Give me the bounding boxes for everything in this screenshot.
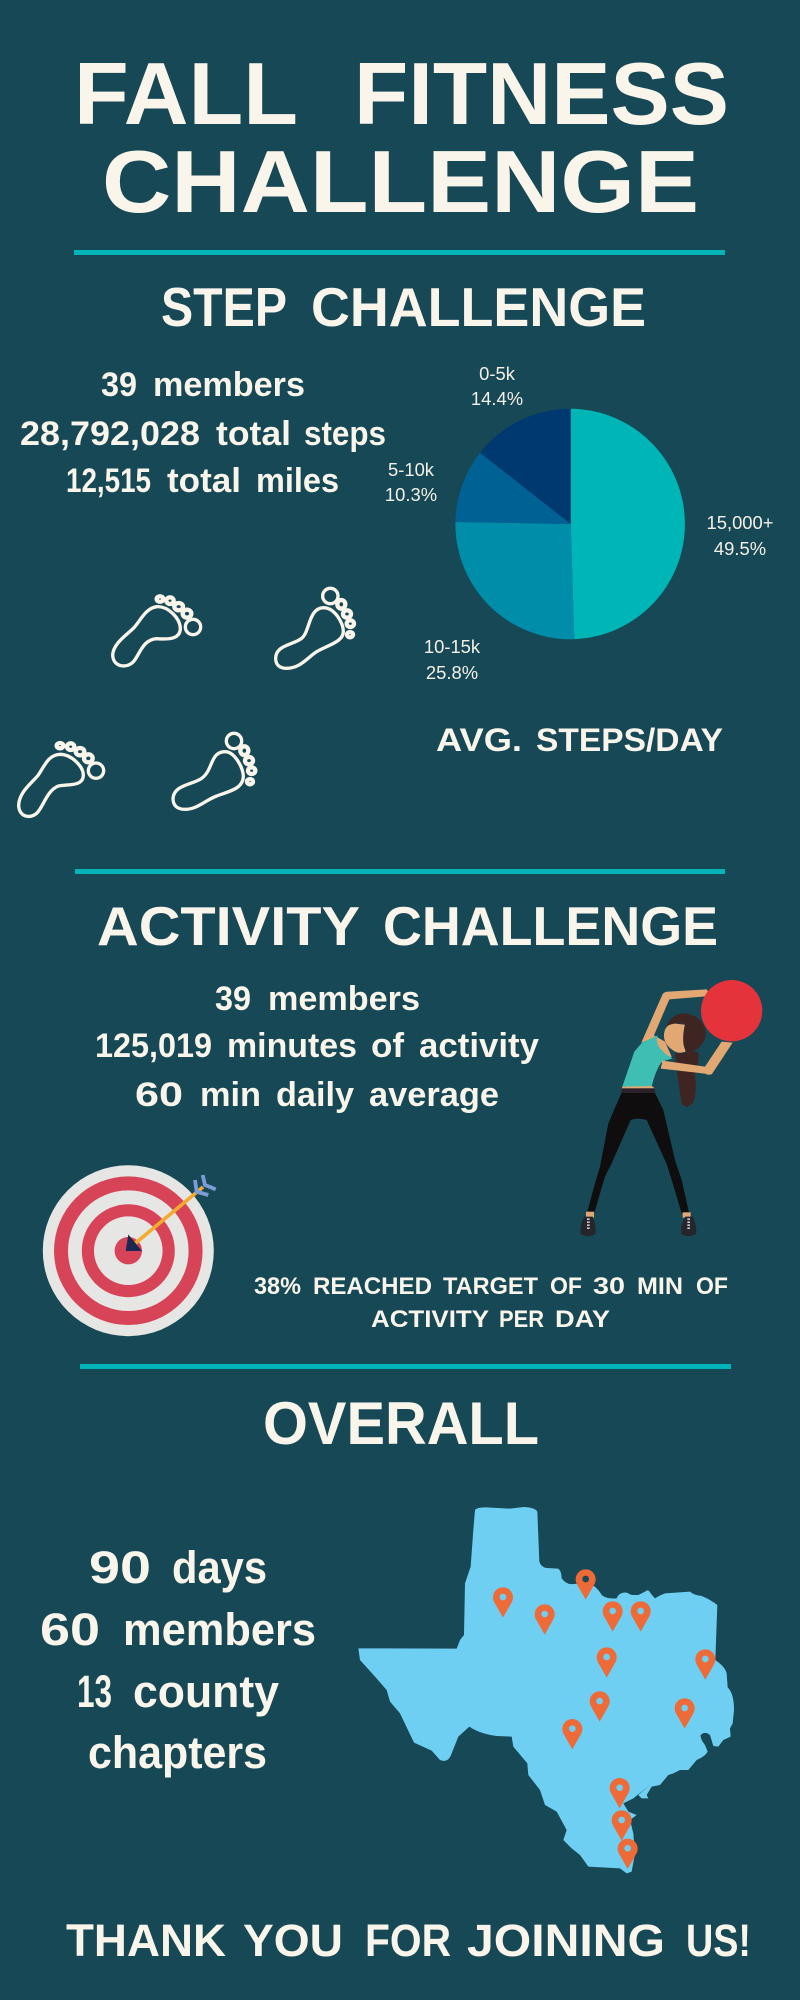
callout: target reached: ACTIVITY bbox=[371, 1306, 489, 1333]
callout: target reached: DAY bbox=[555, 1306, 610, 1333]
title: FITNESS bbox=[354, 44, 729, 143]
title bbox=[74, 44, 729, 231]
callout: target reached: REACHED bbox=[313, 1273, 432, 1300]
heading: step challenge bbox=[161, 276, 646, 338]
pie chart: average steps per day bbox=[455, 409, 685, 639]
callout: target reached: OF bbox=[696, 1273, 728, 1300]
panel: step challenge bbox=[19, 276, 773, 816]
callout: target reached: OF bbox=[550, 1273, 582, 1300]
heading: activity challenge: ACTIVITY bbox=[97, 895, 360, 957]
text block: overall stats: members bbox=[123, 1604, 316, 1655]
callout: target reached: PER bbox=[499, 1306, 544, 1333]
text block: activity stats: average bbox=[369, 1076, 499, 1114]
text block: overall stats: 60 bbox=[40, 1604, 100, 1655]
map: Texas with chapter pins bbox=[358, 1507, 734, 1873]
footer: thank you: US! bbox=[686, 1915, 751, 1966]
callout: target reached bbox=[254, 1273, 728, 1333]
text block: activity stats: 39 bbox=[215, 980, 251, 1018]
title: CHALLENGE bbox=[102, 132, 699, 231]
text block: step stats: members bbox=[153, 366, 305, 404]
footer: thank you: YOU bbox=[243, 1915, 343, 1966]
pie label: 15,000+: 49.5% bbox=[714, 538, 766, 559]
text block: overall stats: 13 bbox=[77, 1666, 112, 1717]
chart caption: AVG. bbox=[436, 722, 522, 758]
callout: target reached: 38% bbox=[254, 1273, 301, 1300]
footer: thank you: JOINING bbox=[467, 1915, 665, 1966]
chart caption bbox=[436, 722, 723, 758]
heading: step challenge: STEP bbox=[161, 276, 287, 338]
pie label: 5-10k: 5-10k bbox=[388, 459, 435, 480]
pie label: 10-15k: 25.8% bbox=[426, 662, 478, 683]
panel: overall bbox=[40, 1390, 734, 1873]
footer: thank you bbox=[66, 1915, 751, 1966]
pie label: 15,000+ bbox=[706, 512, 774, 559]
text block: step stats: total bbox=[167, 462, 241, 500]
heading: step challenge: CHALLENGE bbox=[311, 276, 646, 338]
heading: activity challenge: CHALLENGE bbox=[383, 895, 718, 957]
text block: overall stats: chapters bbox=[88, 1727, 267, 1778]
text block: step stats: total bbox=[216, 415, 291, 453]
icon: woman stretching with exercise ball bbox=[580, 980, 762, 1236]
text block: step stats: 39 bbox=[101, 366, 137, 404]
footer: thank you: THANK bbox=[66, 1915, 227, 1966]
icon: footprints bbox=[19, 588, 354, 816]
text block: activity stats: members bbox=[268, 980, 420, 1018]
text block: overall stats bbox=[40, 1542, 316, 1778]
pie label: 10-15k bbox=[424, 636, 481, 683]
text block: activity stats: min bbox=[200, 1076, 261, 1114]
text block: step stats: 12,515 bbox=[66, 462, 151, 500]
text block: step stats bbox=[20, 366, 386, 500]
text block: step stats: 28,792,028 bbox=[20, 415, 200, 453]
text block: activity stats: minutes bbox=[227, 1027, 357, 1065]
title: FALL bbox=[74, 44, 298, 143]
pie label: 0-5k: 14.4% bbox=[471, 388, 523, 409]
pie label: 0-5k bbox=[471, 363, 523, 409]
footer: thank you: FOR bbox=[365, 1915, 451, 1966]
text block: step stats: steps bbox=[304, 415, 386, 453]
text block: activity stats bbox=[95, 980, 539, 1114]
callout: target reached: 30 bbox=[593, 1273, 625, 1300]
icon: target with arrow bbox=[43, 1165, 216, 1336]
pie label: 5-10k bbox=[385, 459, 437, 505]
text block: step stats: miles bbox=[256, 462, 339, 500]
text block: activity stats: activity bbox=[419, 1027, 539, 1065]
pie label: 5-10k: 10.3% bbox=[385, 484, 437, 505]
text block: overall stats: days bbox=[172, 1542, 267, 1593]
heading: overall: OVERALL bbox=[263, 1390, 539, 1457]
callout: target reached: TARGET bbox=[443, 1273, 538, 1300]
text block: activity stats: 60 bbox=[135, 1076, 183, 1114]
pie label: 10-15k: 10-15k bbox=[424, 636, 481, 657]
text block: overall stats: county bbox=[133, 1666, 279, 1717]
text block: activity stats: daily bbox=[276, 1076, 354, 1114]
text block: activity stats: 125,019 bbox=[95, 1027, 212, 1065]
heading: activity challenge bbox=[97, 895, 718, 957]
panel: activity challenge bbox=[43, 895, 762, 1336]
pie label: 0-5k: 0-5k bbox=[479, 363, 516, 384]
chart caption: STEPS/DAY bbox=[536, 722, 723, 758]
pie label: 15,000+: 15,000+ bbox=[706, 512, 774, 533]
text block: activity stats: of bbox=[371, 1027, 405, 1065]
text block: overall stats: 90 bbox=[89, 1542, 151, 1593]
callout: target reached: MIN bbox=[637, 1273, 683, 1300]
